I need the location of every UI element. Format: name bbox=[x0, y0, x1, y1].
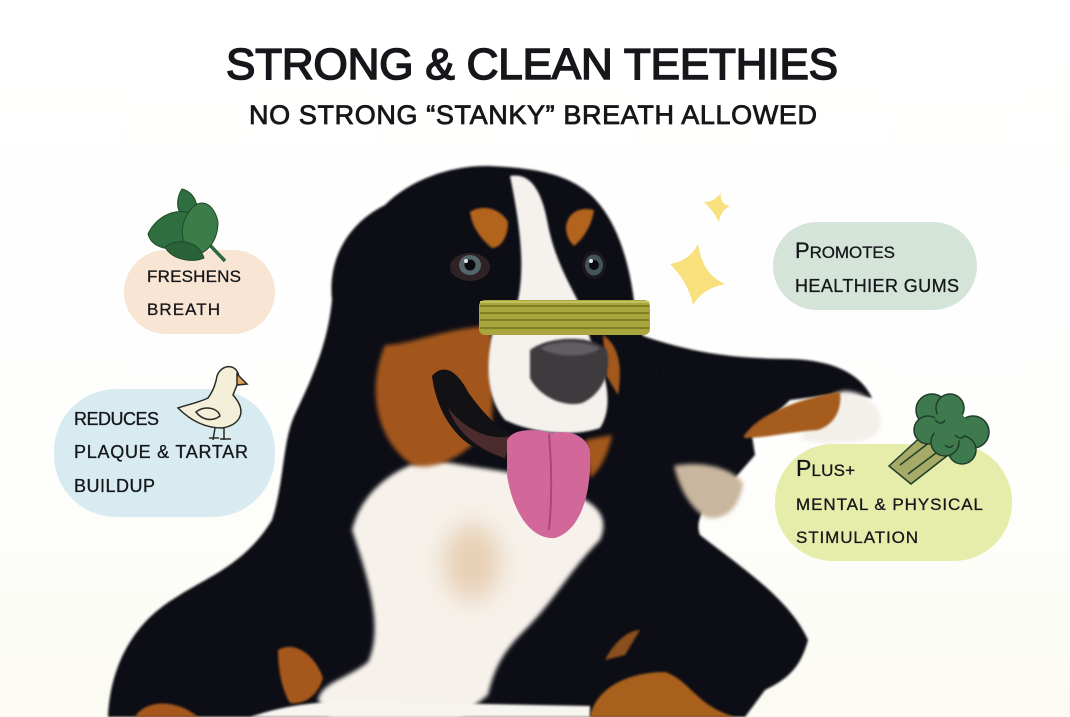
dog: tongue bbox=[507, 430, 590, 538]
panel: reduces plaque and tartar buildup: REDUCES bbox=[74, 409, 159, 429]
dog: right chest tan bbox=[605, 630, 640, 660]
dog: body silhouette bbox=[108, 166, 808, 717]
dog: cheek tan right bbox=[603, 335, 620, 395]
dog: left leg tan bbox=[278, 647, 323, 703]
dog: front paw tan bbox=[590, 672, 735, 717]
panel: freshens breath: BREATH bbox=[147, 300, 220, 319]
panel: promotes healthier gums bbox=[773, 222, 977, 310]
panel: reduces plaque and tartar buildup: BUILDUP bbox=[74, 476, 155, 496]
dog: eyebrow left bbox=[470, 208, 508, 248]
dog: mouth interior bbox=[448, 408, 512, 458]
panel: reduces plaque and tartar buildup: PLAQUE & TARTAR bbox=[74, 442, 248, 462]
dog: chest white bbox=[318, 458, 603, 717]
panel: plus mental and physical stimulation: STIMULATION bbox=[796, 528, 918, 547]
dog: eyebrow right bbox=[566, 209, 594, 246]
panel: freshens breath: FRESHENS bbox=[147, 267, 241, 286]
dog photo bbox=[108, 166, 881, 717]
panel: plus mental and physical stimulation: PLUS+ bbox=[796, 455, 855, 481]
dog: right eye bbox=[582, 251, 606, 279]
dog: muzzle black lip bbox=[432, 369, 530, 462]
sparkle large bbox=[670, 244, 725, 305]
dog: chest tan shading bbox=[444, 524, 500, 600]
dog: white blaze bbox=[488, 175, 608, 433]
sparkle small bbox=[704, 193, 730, 222]
dental stick treat bbox=[479, 300, 650, 335]
title: STRONG & CLEAN TEETHIES bbox=[226, 40, 838, 89]
subtitle: NO STRONG “STANKY” BREATH ALLOWED bbox=[249, 100, 817, 130]
panel: freshens breath bbox=[124, 250, 275, 334]
panel: promotes healthier gums: PROMOTES bbox=[795, 238, 895, 263]
icon: duck bbox=[178, 367, 247, 440]
icon: spinach bbox=[148, 189, 225, 261]
title bbox=[226, 40, 838, 130]
panel: promotes healthier gums: HEALTHIER GUMS bbox=[795, 276, 959, 296]
dog: tongue crease bbox=[549, 434, 551, 530]
dog: cheek tan left bbox=[376, 326, 493, 467]
dog: tan under mouth right bbox=[585, 435, 612, 478]
dog: rear paw bbox=[674, 464, 743, 518]
panel: plus mental and physical stimulation: MENTAL & PHYSICAL bbox=[796, 495, 983, 514]
panel: reduces plaque and tartar buildup bbox=[54, 389, 275, 517]
panel: plus mental and physical stimulation bbox=[775, 444, 1012, 561]
dog: nose highlight bbox=[540, 342, 600, 356]
dog: white floor foreground bbox=[250, 701, 590, 717]
dog: left eye bbox=[450, 253, 490, 281]
dog: nose bbox=[530, 339, 608, 404]
icon: broccoli bbox=[889, 394, 989, 484]
dog: bottom left tan bbox=[135, 703, 198, 717]
dog: rear body and tail bbox=[600, 320, 881, 500]
